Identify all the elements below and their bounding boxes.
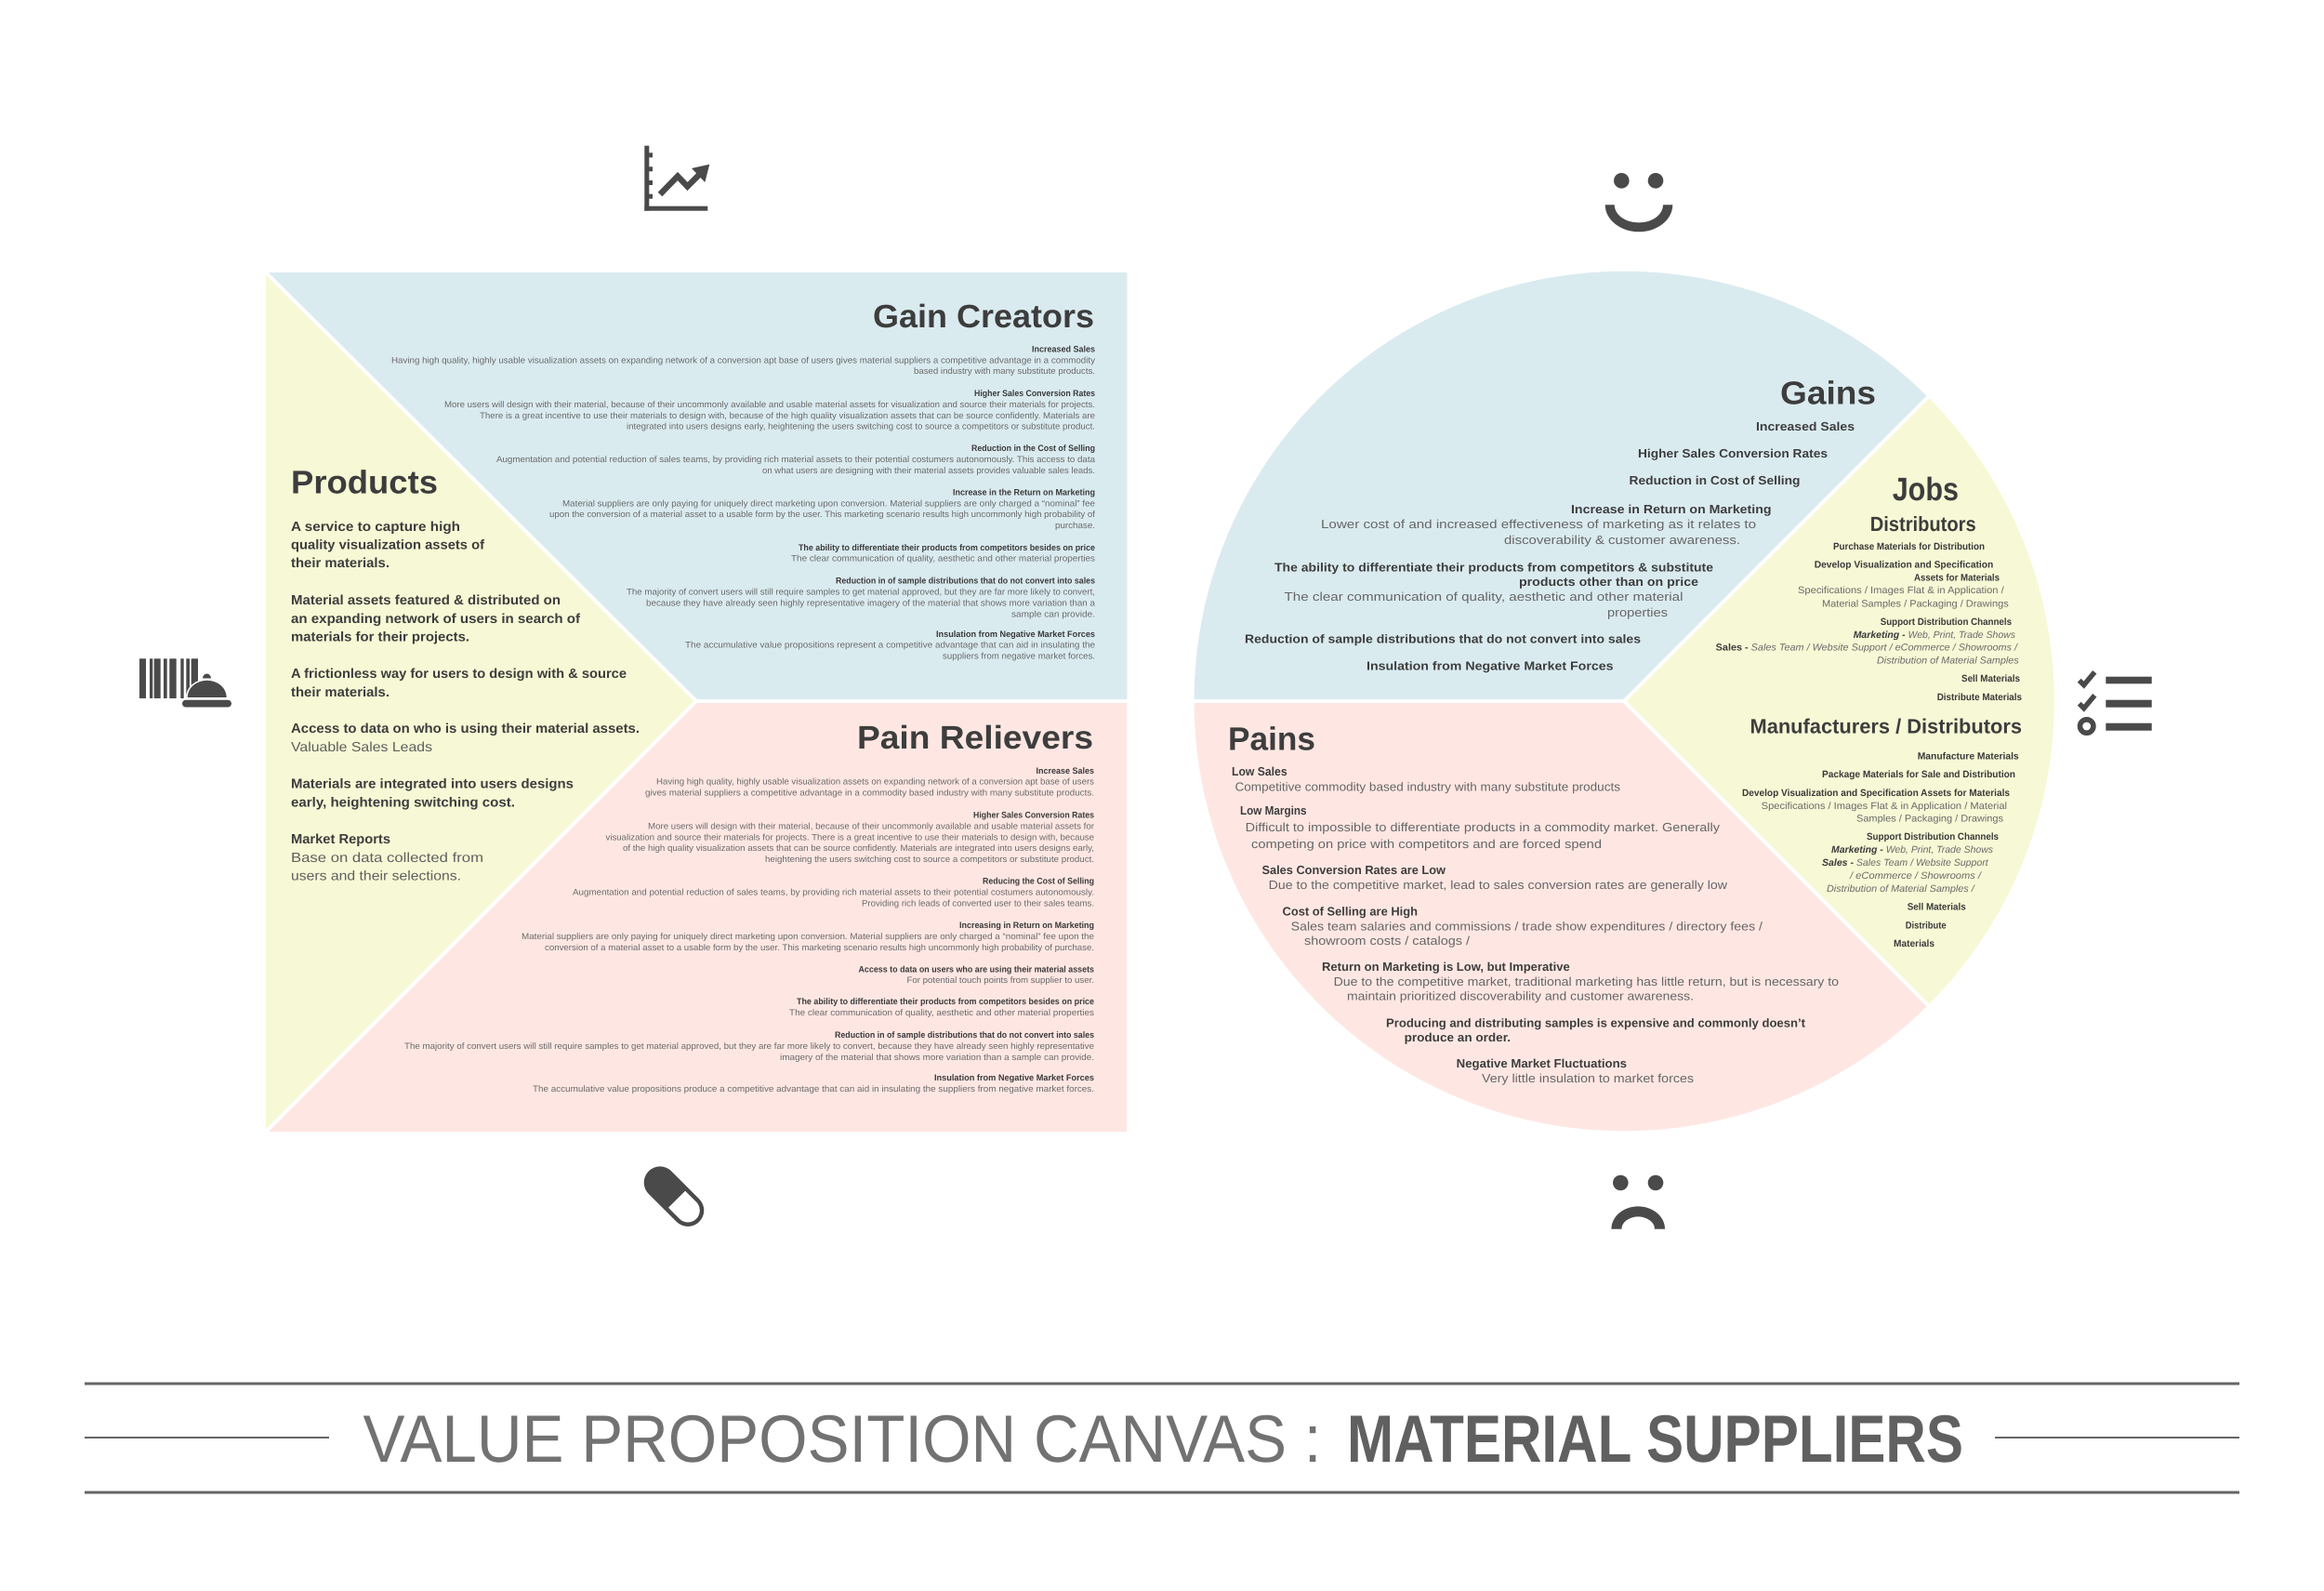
text block: pain relievers items [404,766,1094,1094]
icon: sad face [1611,1175,1665,1229]
text block: pain relievers items: The majority of convert users will still require samples to get material approved, but they are far more likely to convert, because they have already seen highly representative [404,1041,1094,1052]
text block: pains items: Sales Conversion Rates are Low [1262,863,1446,877]
text block: gain creators items: Insulation from Negative Market Forces [936,630,1095,640]
text block: manufacturers jobs: Materials [1894,938,1934,949]
heading: products: Products [291,465,438,501]
panel: jobs sector [1624,397,2054,1005]
text block: manufacturers jobs: / eCommerce / Showrooms / [1849,870,1982,882]
left square: value map [266,272,1129,1132]
text block: gain creators items: The majority of convert users will still require samples to get material approved, but they are far more likely to convert, [627,588,1095,597]
text block: distributors jobs: Material Samples / Packaging / Drawings [1822,599,2009,610]
text block: pains items: Cost of Selling are High [1283,904,1418,919]
text block: distributors jobs [1716,541,2022,703]
text block: distributors jobs: Support Distribution Channels [1881,617,2012,628]
text block: products list: quality visualization assets of [291,537,484,552]
text block: gain creators items: Augmentation and potential reduction of sales teams, by providing rich material assets to their potential costumers autonomously. This access to data [496,455,1096,465]
text block: pain relievers items: visualization and source their materials for projects. There is a great incentive to use their materials to design with, because [606,833,1094,842]
title banner [85,1384,2239,1492]
text block: pain relievers items: Increasing in Return on Marketing [959,921,1094,931]
text block: distributors jobs: Purchase Materials for Distribution [1833,541,1985,552]
text block: products list: Valuable Sales Leads [291,740,432,755]
heading: pains: Pains [1228,722,1315,758]
text block: manufacturers jobs: Manufacture Materials [1918,751,2019,762]
text block: pains items: Competitive commodity based industry with many substitute products [1235,779,1621,794]
text block: gain creators items: integrated into users designs early, heightening the users switching cost to source a competitors or substitute product. [627,422,1095,431]
text block: gain creators items: The accumulative value propositions represent a competitive advantage that can aid in insulating the [685,640,1095,651]
text block: distributors jobs: Sales - Sales Team / Website Support / eCommerce / Showrooms / [1716,642,2018,653]
text block: pain relievers items: Access to data on users who are using their material assets [859,965,1094,974]
text block: pain relievers items: Reduction in of sample distributions that do not convert into sales [835,1030,1094,1041]
title: bold part: MATERIAL SUPPLIERS [1347,1402,1963,1477]
text block: gains items: Higher Sales Conversion Rates [1638,446,1828,460]
heading: jobs: Jobs [1893,471,1959,508]
text block: gain creators items: The ability to differentiate their products from competitors besides on price [799,543,1095,553]
text block: pains items: Very little insulation to market forces [1482,1071,1695,1085]
text block: products list: their materials. [291,556,390,571]
text block: products list: Material assets featured & distributed on [291,593,561,608]
text block: pains items: Sales team salaries and commissions / trade show expenditures / directory fees / [1291,919,1763,934]
text block: distributors jobs: Distribution of Material Samples [1877,655,2019,666]
panel: pains sector [1194,701,1928,1131]
text block: pains items: Negative Market Fluctuations [1457,1056,1627,1070]
text block: pain relievers items: conversion of a material asset to a usable form by the user. This marketing scenario results high uncommonly high probability of purchase. [545,943,1094,953]
heading: manufacturers / distributors: Manufacturers / Distributors [1750,715,2022,738]
text block: gain creators items: on what users are designing with their material assets provides valuable sales leads. [762,466,1095,476]
text block: gains items: The clear communication of quality, aesthetic and other material [1285,590,1684,603]
text block: products list: Base on data collected from [291,851,483,866]
text block: manufacturers jobs: Develop Visualization and Specification Assets for Materials [1742,788,2010,799]
text block: products list: users and their selections. [291,868,461,883]
text block: gain creators items: upon the conversion of a material asset to a usable form by the user. This marketing scenario results high uncommonly high probability of [549,510,1095,520]
text block: gain creators items: Reduction in of sample distributions that do not convert into sales [836,577,1095,586]
text block: gains items [1245,419,1855,673]
text block: manufacturers jobs: Distribution of Material Samples / [1827,883,1975,895]
icon: growth chart [644,146,709,211]
text block: gain creators items: Increased Sales [1032,344,1095,355]
text block: gain creators items: There is a great incentive to use their materials to design with, because of the high quality visualization assets that can be source confidently. Materials are [480,411,1095,421]
text block: gain creators items: Having high quality, highly usable visualization assets on expanding network of a conversion apt base of users gives material suppliers a competitive advantage in a commodity [391,355,1095,366]
text block: manufacturers jobs: Marketing - Web, Print, Trade Shows [1831,844,1994,855]
text block: manufacturers jobs: Support Distribution Channels [1867,831,1999,842]
text block: pain relievers items: heightening the users switching cost to source a competitors or substitute product. [765,855,1094,865]
text block: gain creators items: suppliers from negative market forces. [943,651,1095,662]
icon: pill [638,1160,710,1233]
text block: pains items: Producing and distributing samples is expensive and commonly doesn’t [1386,1015,1806,1030]
text block: products list: materials for their projects. [291,630,469,645]
text block: manufacturers jobs: Samples / Packaging / Drawings [1856,813,2003,824]
text block: distributors jobs: Assets for Materials [1914,573,2000,584]
text block: gain creators items: because they have already seen highly representative imagery of the material that shows more variation than a [646,599,1096,608]
text block: pain relievers items: The accumulative value propositions produce a competitive advantage that can aid in insulating the suppliers from negative market forces. [533,1084,1094,1094]
text block: gains items: Lower cost of and increased effectiveness of marketing as it relates to [1321,517,1756,531]
title: light part: VALUE PROPOSITION CANVAS : [363,1402,1322,1477]
text block: pains items: Due to the competitive market, lead to sales conversion rates are generally low [1269,878,1728,892]
icon: checklist [2080,672,2152,733]
icon: smiling face [1605,173,1672,232]
text block: gains items: Increase in Return on Marketing [1571,502,1772,516]
text block: pains items: maintain prioritized discoverability and customer awareness. [1347,989,1694,1002]
text block: pains items: Low Sales [1232,764,1287,778]
text block: products list: an expanding network of users in search of [291,612,580,627]
text block: gains items: Insulation from Negative Market Forces [1367,658,1614,673]
text block: pain relievers items: Insulation from Negative Market Forces [934,1073,1094,1083]
text block: gains items: discoverability & customer awareness. [1504,533,1740,547]
text block: products list: Market Reports [291,832,390,847]
text block: distributors jobs: Sell Materials [1961,673,2020,684]
text block: gains items: Reduction in Cost of Selling [1629,473,1801,487]
text block: manufacturers jobs: Distribute [1906,921,1947,932]
text block: distributors jobs: Marketing - Web, Print, Trade Shows [1854,630,2016,641]
text block: gain creators items: Material suppliers are only paying for uniquely direct marketing upon conversion. Material suppliers are only charged a “nominal” fee [562,498,1095,510]
text block: gain creators items: Increase in the Return on Marketing [953,487,1095,498]
text block: products list: Materials are integrated into users designs [291,777,574,792]
panel: gains sector [1194,272,1928,701]
text block: manufacturers jobs: Sell Materials [1908,902,1966,913]
right circle: customer profile [1192,272,2054,1131]
text block: gain creators items: based industry with many substitute products. [914,366,1095,377]
text block: gain creators items: The clear communication of quality, aesthetic and other material properties [791,554,1095,563]
text block: pain relievers items: Higher Sales Conversion Rates [973,811,1094,820]
text block: gains items: properties [1607,605,1669,619]
text block: gain creators items: More users will design with their material, because of their uncommonly available and usable material assets for visualization and source their materials for projects. [444,400,1095,410]
heading: gains: Gains [1780,375,1876,411]
text block: pain relievers items: Material suppliers are only paying for uniquely direct marketing upon conversion. Material suppliers are only charged a “nominal” fee upon the [522,932,1094,942]
text block: pain relievers items: Reducing the Cost of Selling [983,876,1094,887]
text block: distributors jobs: Specifications / Images Flat & in Application / [1798,585,2004,596]
text block: pains items [1232,764,1839,1085]
text block: gain creators items: Reduction in the Cost of Selling [971,444,1095,454]
text block: pains items: Low Margins [1240,803,1307,817]
panel: gain creators background [266,272,1127,701]
text block: pain relievers items: of the high quality visualization assets that can be source confidently. Materials are integrated into users designs early, [623,843,1094,854]
text block: pain relievers items: More users will design with their material, because of their uncommonly available and usable material assets for [648,822,1094,831]
icon: barcode and service bell [139,658,231,707]
text block: pain relievers items: For potential touch points from supplier to user. [907,975,1094,986]
text block: products list: their materials. [291,685,390,700]
text block: pains items: showroom costs / catalogs / [1304,934,1470,948]
text block: manufacturers jobs [1742,751,2019,949]
text block: pain relievers items: Providing rich leads of converted user to their sales teams. [862,898,1094,909]
text block: pain relievers items: imagery of the material that shows more variation than a sample can provide. [780,1053,1094,1063]
text block: pain relievers items: The ability to differentiate their products from competitors besides on price [797,997,1094,1007]
text block: products list: A service to capture high [291,520,460,535]
text block: pains items: competing on price with competitors and are forced spend [1251,837,1602,851]
text block: gains items: products other than on price [1519,575,1698,589]
text block: pains items: Due to the competitive market, traditional marketing has little return, but is necessary to [1334,974,1839,988]
text block: pain relievers items: gives material suppliers a competitive advantage in a commodity based industry with many substitute products. [645,789,1094,798]
text block: pain relievers items: The clear communication of quality, aesthetic and other material properties [789,1008,1094,1018]
text block: gain creators items: sample can provide. [1011,610,1095,619]
text block: gain creators items: Higher Sales Conversion Rates [974,389,1095,399]
text block: products list: early, heightening switching cost. [291,796,515,811]
text block: pain relievers items: Augmentation and potential reduction of sales teams, by providing rich material assets to their potential costumers autonomously. [573,887,1094,898]
text block: pains items: Difficult to impossible to differentiate products in a commodity market. Generally [1246,820,1721,834]
text block: gains items: The ability to differentiate their products from competitors & substitute [1274,560,1713,575]
text block: products list [291,520,640,883]
heading: pain relievers: Pain Relievers [857,720,1093,756]
text block: pain relievers items: Having high quality, highly usable visualization assets on expanding network of a conversion apt base of users [656,777,1094,787]
heading: distributors: Distributors [1870,512,1976,536]
text block: gains items: Increased Sales [1756,419,1855,433]
text block: distributors jobs: Distribute Materials [1937,692,2022,703]
heading: gain creators: Gain Creators [873,298,1094,335]
panel: pain relievers background [266,701,1127,1132]
text block: pains items: produce an order. [1405,1030,1511,1044]
text block: distributors jobs: Develop Visualization and Specification [1815,560,1993,571]
text block: pains items: Return on Marketing is Low, but Imperative [1322,960,1570,974]
text block: products list: Access to data on who is using their material assets. [291,722,640,736]
text block: manufacturers jobs: Package Materials for Sale and Distribution [1822,769,2015,780]
panel: products background [266,272,695,1132]
text block: gains items: Reduction of sample distributions that do not convert into sales [1245,632,1641,645]
text block: products list: A frictionless way for users to design with & source [291,667,627,682]
text block: gain creators items [391,344,1096,662]
text block: pain relievers items: Increase Sales [1036,766,1094,776]
text block: manufacturers jobs: Specifications / Images Flat & in Application / Material [1762,801,2007,812]
text block: gain creators items: purchase. [1055,521,1095,531]
text block: manufacturers jobs: Sales - Sales Team / Website Support [1822,857,1989,868]
